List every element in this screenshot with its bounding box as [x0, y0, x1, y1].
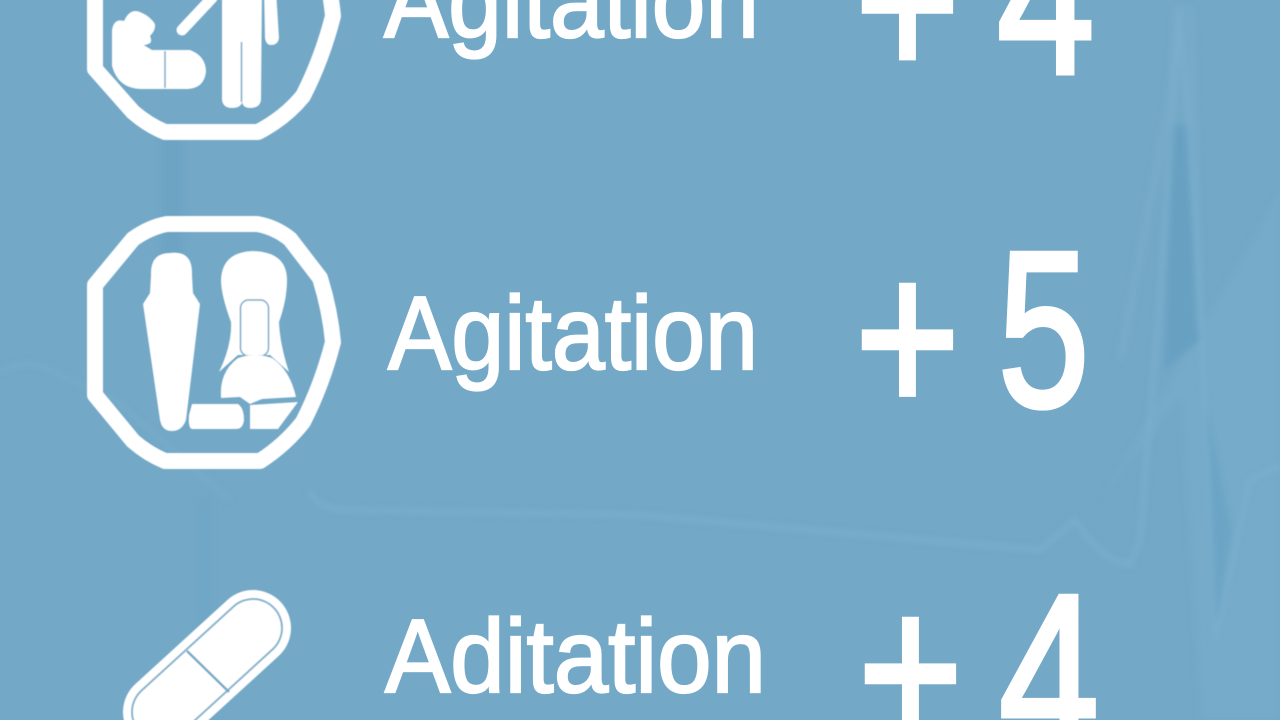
row 3 — [161, 547, 1099, 720]
icon: body and boot — [95, 224, 333, 461]
value: +5: 5 — [998, 206, 1089, 454]
value: +4 — [858, 547, 1099, 720]
row 2 — [95, 206, 1089, 461]
label: Aditation: Aditation — [385, 599, 766, 715]
value: +4 — [855, 0, 1095, 125]
row 1 — [95, 0, 1095, 132]
icon: person with arm cast — [95, 0, 333, 132]
value: +5: + — [855, 213, 960, 461]
value: +5 — [855, 206, 1089, 461]
icon: capsule pill — [161, 628, 253, 712]
label: Agitation: Agitation — [388, 276, 758, 392]
